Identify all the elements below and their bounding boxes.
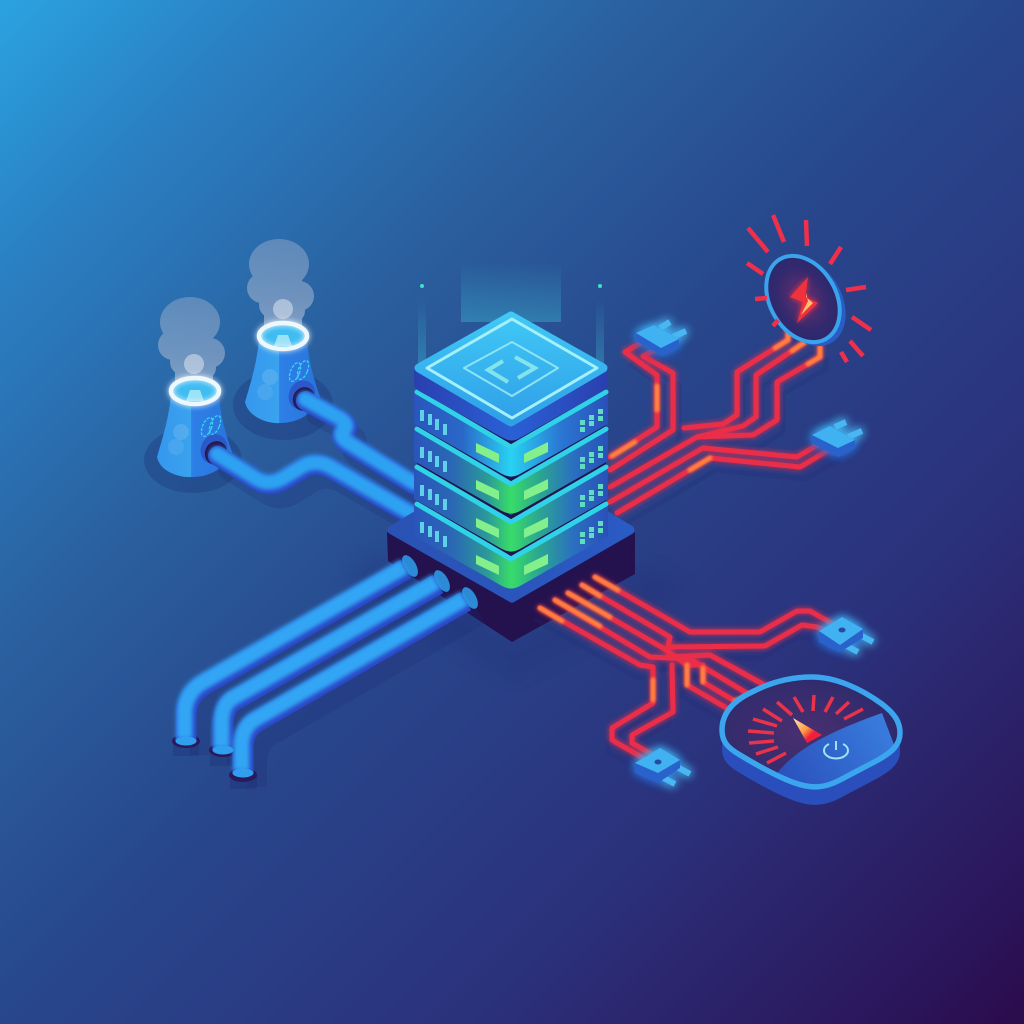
- right cooling tower: [245, 323, 320, 423]
- light beams above server: [418, 262, 604, 368]
- server layer 4: [414, 498, 608, 588]
- lightning disc: [751, 243, 861, 360]
- server layer 2: [414, 423, 608, 514]
- pipe end caps: [176, 736, 254, 778]
- plug: lower left: [635, 748, 690, 784]
- plug: right: [812, 422, 862, 457]
- power wires to lower right: [536, 577, 833, 770]
- pipe bodies: [186, 569, 466, 773]
- smoke from right cooling tower: [247, 239, 314, 337]
- foot shadows and feet: [172, 734, 257, 789]
- bracket symbol: [488, 357, 535, 382]
- coolant pipes to lower left: [172, 553, 481, 789]
- server layer 3: [414, 461, 608, 552]
- energy rays around disc: [747, 215, 871, 362]
- power icon: [824, 741, 848, 758]
- gauge ticks: [748, 695, 863, 763]
- smoke from left cooling tower: [158, 297, 225, 392]
- server layer 1: [414, 386, 608, 476]
- server top slab: [414, 316, 608, 440]
- server base plinth: [387, 458, 635, 642]
- power wires to upper right: [610, 330, 838, 525]
- power gauge: [722, 677, 915, 805]
- pipe flanges: [399, 553, 481, 611]
- left cooling tower: [157, 378, 232, 477]
- plug: upper left: [636, 322, 686, 356]
- pipe highlights: [184, 566, 464, 770]
- gauge needle: [793, 718, 822, 743]
- pipe shadows: [200, 583, 480, 787]
- plug: lower right: [819, 617, 873, 652]
- smoke highlight right: [273, 299, 293, 319]
- smoke highlight left: [184, 354, 204, 374]
- cooling pipes behind server: [217, 399, 425, 531]
- ground shadows: [144, 370, 690, 680]
